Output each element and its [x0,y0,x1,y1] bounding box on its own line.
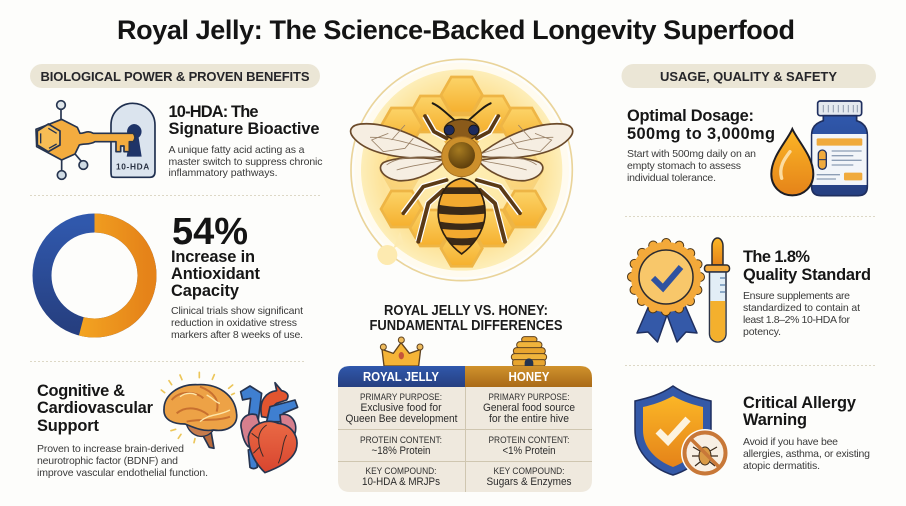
text: 54% antioxidant: Increase in [171,248,255,266]
text: allergy warning: Avoid if you have bee [743,436,838,448]
bee head and thorax [442,119,482,177]
text: quality standard: standardized to contain at [743,302,860,314]
text: cognitive and cardiovascular [37,382,208,479]
comparison table: for the entire hive [489,413,569,425]
text: optimal dosage: Start with 500mg daily on an [627,148,756,160]
icon: dropper test tube [704,238,730,342]
illustration: bee on honeycomb emblem [351,59,573,281]
text: cognitive and cardiovascular: Support [37,417,100,435]
comparison table: HONEY [508,370,550,384]
comparison table: <1% Protein [502,445,556,457]
comparison table: Queen Bee development [346,413,458,425]
text: allergy warning [743,394,870,472]
text: quality standard [743,248,871,338]
text: quality standard: potency. [743,326,781,338]
left section heading pill: BIOLOGICAL POWER & PROVEN BENEFITS [40,69,310,84]
text: 54% antioxidant: markers after 8 weeks of use. [171,329,303,341]
text: allergy warning: allergies, asthma, or existing [743,448,870,460]
text: cognitive and cardiovascular: improve vascular endothelial function. [37,467,208,479]
text: optimal dosage: 500mg to 3,000mg [627,125,775,143]
text: 54% antioxidant: reduction in oxidative stress [171,317,297,329]
text: 10-HDA: A unique fatty acid acting as a [168,144,305,156]
comparison table: Exclusive food for [360,402,442,414]
text: 54% antioxidant: 54% [172,211,248,253]
comparison table: General food source [483,402,575,414]
icon: quality rosette with ribbons [631,242,701,342]
text: optimal dosage: Optimal Dosage: [627,107,754,125]
comparison table: KEY COMPOUND: [494,466,564,476]
text: 54% antioxidant: Clinical trials show significant [171,305,303,317]
heading: comparison: ROYAL JELLY VS. HONEY: [384,303,548,319]
text: 10-HDA: Signature Bioactive [168,120,320,138]
text: cognitive and cardiovascular: Cardiovascular [37,399,154,417]
text: 10-HDA: inflammatory pathways. [168,167,278,179]
text: quality standard: The 1.8% [743,248,810,266]
text: cognitive and cardiovascular: Cognitive & [37,382,125,400]
text: 54% antioxidant: Antioxidant [171,265,261,283]
heading: comparison: FUNDAMENTAL DIFFERENCES [370,318,563,334]
text: 10-HDA: 10-HDA: The [168,103,258,121]
text: quality standard: Quality Standard [743,266,871,284]
icon: brain and heart [161,372,298,473]
text: optimal dosage: empty stomach to assess [627,160,741,172]
left section heading pill [30,64,320,88]
comparison table [338,366,592,492]
text: allergy warning: Critical Allergy [743,394,857,412]
comparison table: PRIMARY PURPOSE: [488,392,570,402]
text: 54% antioxidant [171,211,303,341]
comparison table: PROTEIN CONTENT: [488,435,570,445]
comparison table: PRIMARY PURPOSE: [360,392,442,402]
text: allergy warning: Warning [743,411,807,429]
text: optimal dosage [627,107,775,184]
title: Royal Jelly: The Science-Backed Longevity Superfood [117,15,795,45]
bee left wings and legs [351,103,455,242]
text: cognitive and cardiovascular: Proven to increase brain-derived [37,443,184,455]
bee abdomen [437,178,486,255]
right section heading pill [622,64,876,88]
comparison table: KEY COMPOUND: [366,466,436,476]
text: optimal dosage: individual tolerance. [627,172,716,184]
text: allergy warning: atopic dermatitis. [743,460,820,472]
text: quality standard: least 1.8–2% 10-HDA for [743,314,850,326]
comparison table: 10-HDA & MRJPs [362,476,441,488]
text: quality standard: Ensure supplements are [743,290,850,302]
icon: beehive [511,337,547,366]
heading: comparison [370,303,563,334]
icon: 10-HDA molecule key in lock: 10-HDA [116,162,149,172]
bee right wings and legs [468,103,573,242]
text: cognitive and cardiovascular: neurotrophic factor (BDNF) and [37,455,178,467]
right section heading pill: USAGE, QUALITY & SAFETY [660,69,837,84]
comparison table: ~18% Protein [372,445,430,457]
icon: shield with no-bee badge [635,386,729,477]
text: 54% antioxidant: Capacity [171,282,240,300]
icon: crown [380,337,423,366]
text: 10-HDA: master switch to suppress chronic [168,156,322,168]
table header: royal jelly [338,366,465,387]
comparison table: ROYAL JELLY [363,370,440,384]
chart: 54% donut [42,223,147,328]
icon: drop and supplement bottle [771,101,867,196]
table header: honey [465,366,592,387]
comparison table: Sugars & Enzymes [486,476,572,488]
comparison table: PROTEIN CONTENT: [360,435,442,445]
text: 10-HDA [168,103,322,179]
icon: 10-HDA molecule key in lock [36,101,155,179]
